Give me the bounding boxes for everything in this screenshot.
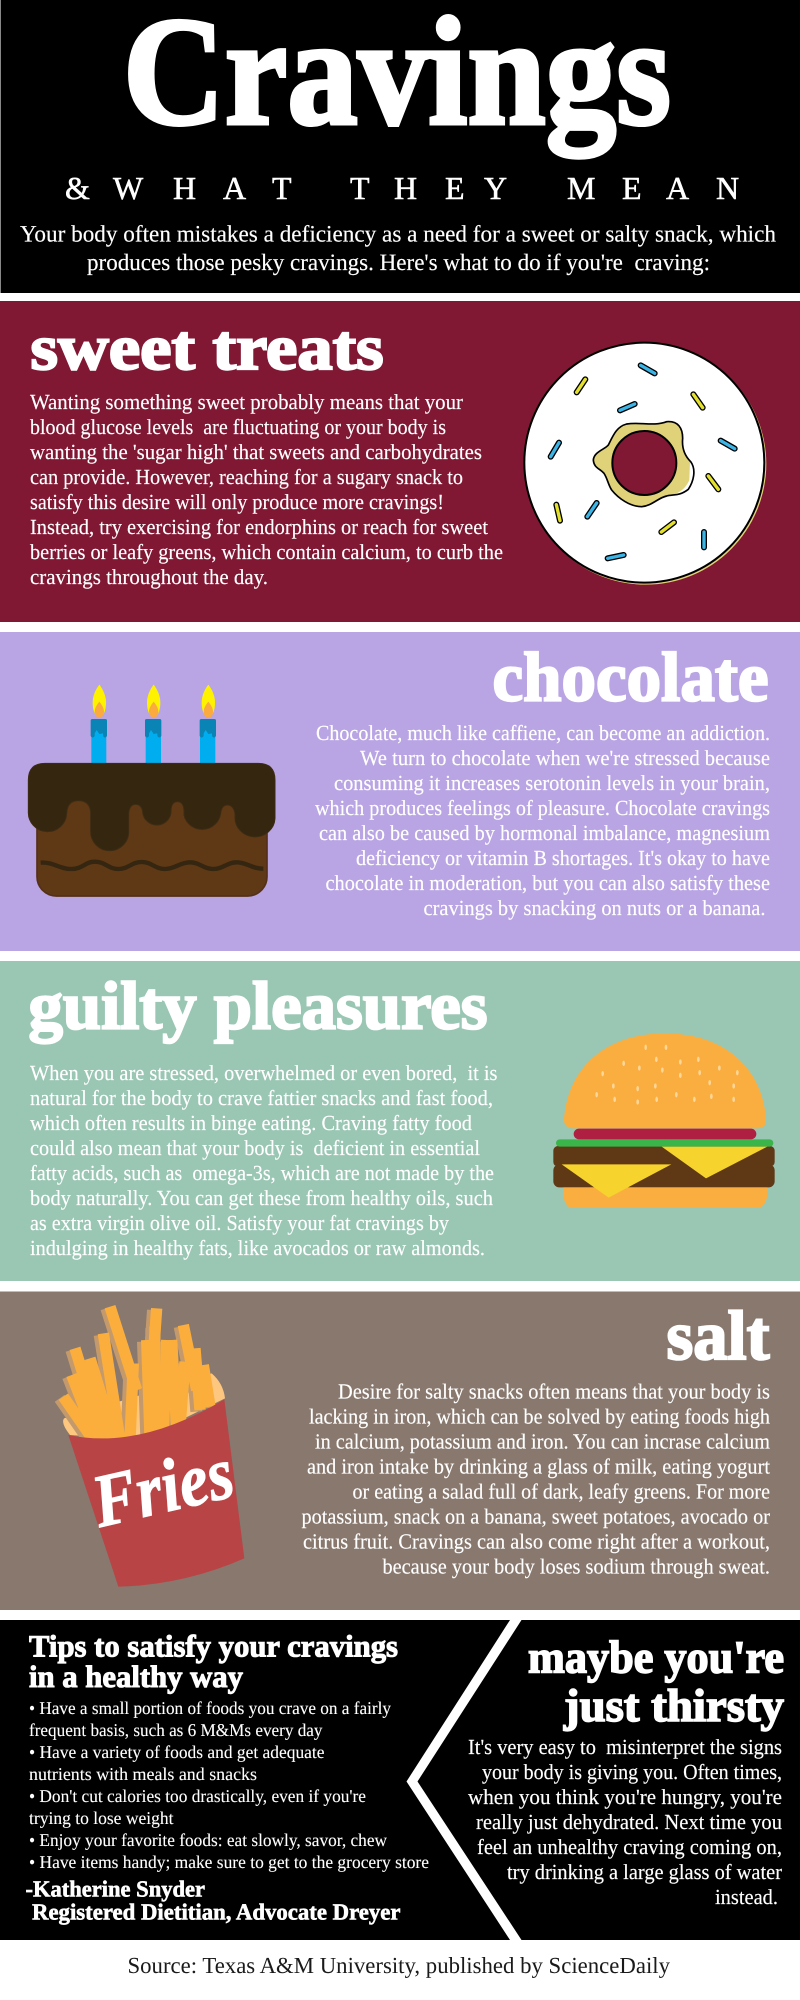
heading: sweet treats: sweet treats [30,312,384,383]
text: attribution: Registered Dietitian, Advocate Dreyer [32,1900,400,1926]
text: guilty pleasures body: indulging in healthy fats, like avocados or raw almonds. [30,1236,485,1260]
text: tips list: nutrients with meals and snacks [29,1764,257,1784]
text: chocolate body: deficiency or vitamin B shortages. It's okay to have [356,846,770,870]
text: chocolate body: cravings by snacking on nuts or a banana. [424,896,766,920]
arrow: white chevron divider [406,1620,522,1940]
text: tips list: • Have a small portion of foods you crave on a fairly [29,1698,391,1718]
panel: guilty pleasures [0,961,800,1281]
panel: header [0,0,800,293]
text: chocolate body [315,721,770,920]
text: thirst body: instead. [715,1885,778,1909]
text: tips list: • Have items handy; make sure to get to the grocery store [29,1852,429,1872]
text: chocolate body: consuming it increases serotonin levels in your brain, [334,771,770,795]
text: salt body: because your body loses sodium through sweat. [382,1554,770,1578]
text: salt body: or eating a salad full of dark, leafy greens. For more [352,1480,770,1504]
text: chocolate body: can also be caused by hormonal imbalance, magnesium [319,821,770,845]
text: sweet treats body [30,390,503,589]
icon: birthday cake [28,685,275,896]
text: guilty pleasures body: which often results in binge eating. Craving fatty food [30,1111,472,1135]
text: guilty pleasures body: When you are stressed, overwhelmed or even bored, it is [30,1061,498,1085]
text: sweet treats body: cravings throughout the day. [30,565,268,589]
text: thirst body: really just dehydrated. Next time you [476,1810,782,1834]
icon: fries: Fries [84,1430,241,1543]
source line: Source: Texas A&M University, published by ScienceDaily [128,1953,670,1978]
heading: salt: salt [666,1298,770,1375]
heading: maybe you're just thirsty: just thirsty [563,1680,784,1731]
text: salt body: potassium, snack on a banana, sweet potatoes, avocado or [302,1504,770,1528]
text: tips list: • Don't cut calories too drastically, even if you're [29,1786,366,1806]
heading: tips [29,1628,398,1694]
text: sweet treats body: can provide. However, reaching for a sugary snack to [30,465,463,489]
text: tips list: • Have a variety of foods and get adequate [29,1742,324,1762]
intro text: Your body often mistakes a deficiency as a need for a sweet or salty snack, which [20,222,776,248]
panel: salt [0,1292,800,1610]
text: chocolate body: which produces feelings of pleasure. Chocolate cravings [315,796,770,820]
icon: burger [553,1033,775,1208]
text: tips list [29,1698,429,1872]
text: chocolate body: We turn to chocolate when we're stressed because [360,746,770,770]
icon: donut [524,343,766,585]
text: thirst body: try drinking a large glass of water [507,1860,782,1884]
heading: maybe you're just thirsty [528,1632,784,1731]
text: sweet treats body: Instead, try exercising for endorphins or reach for sweet [30,515,488,539]
text: guilty pleasures body: natural for the body to crave fattier snacks and fast food, [30,1086,493,1110]
text: salt body: lacking in iron, which can be solved by eating foods high [309,1404,770,1428]
text: thirst body [468,1735,782,1909]
text: sweet treats body: blood glucose levels are fluctuating or your body is [30,415,446,439]
text: thirst body: feel an unhealthy craving coming on, [477,1835,782,1859]
text: guilty pleasures body: as extra virgin olive oil. Satisfy your fat cravings by [30,1211,449,1235]
text: sweet treats body: satisfy this desire will only produce more cravings! [30,490,444,514]
text: sweet treats body: Wanting something sweet probably means that your [30,390,463,414]
text: thirst body: It's very easy to misinterpret the signs [468,1735,782,1759]
text: tips list: • Enjoy your favorite foods: eat slowly, savor, chew [29,1830,387,1850]
panel: sweet treats [0,301,800,622]
text: salt body: citrus fruit. Cravings can also come right after a workout, [303,1530,770,1554]
icon: fries [60,1307,244,1587]
heading: maybe you're just thirsty: maybe you're [528,1632,784,1682]
text: tips list: trying to lose weight [29,1808,174,1828]
heading: tips: in a healthy way [29,1659,243,1694]
text: guilty pleasures body [30,1061,498,1260]
subtitle: & WHAT THEY MEAN [65,170,739,206]
intro text [20,222,776,276]
text: sweet treats body: berries or leafy greens, which contain calcium, to curb the [30,540,503,564]
text: guilty pleasures body: could also mean that your body is deficient in essential [30,1136,480,1160]
text: guilty pleasures body: fatty acids, such as omega-3s, which are not made by the [30,1161,494,1185]
text: salt body: and iron intake by drinking a glass of milk, eating yogurt [307,1454,770,1478]
text: salt body: in calcium, potassium and iron. You can incrase calcium [315,1430,770,1454]
heading: chocolate: chocolate [492,640,768,716]
heading: guilty pleasures: guilty pleasures [28,968,488,1044]
text: thirst body: your body is giving you. Often times, [482,1760,782,1784]
intro text: produces those pesky cravings. Here's what to do if you're craving: [87,250,710,276]
heading: tips: Tips to satisfy your cravings [29,1628,398,1664]
text: thirst body: when you think you're hungry, you're [468,1785,782,1809]
text: salt body [302,1380,770,1578]
panel: tips and thirst [0,1620,800,1940]
text: tips list: frequent basis, such as 6 M&Ms every day [29,1720,322,1740]
text: guilty pleasures body: body naturally. You can get these from healthy oils, such [30,1186,493,1210]
panel: chocolate [0,632,800,951]
text: attribution [26,1876,400,1926]
text: sweet treats body: wanting the 'sugar high' that sweets and carbohydrates [30,440,482,464]
text: attribution: -Katherine Snyder [26,1876,205,1902]
text: salt body: Desire for salty snacks often means that your body is [338,1380,770,1404]
text: chocolate body: Chocolate, much like caffiene, can become an addiction. [316,721,770,745]
text: chocolate body: chocolate in moderation, but you can also satisfy these [326,871,770,895]
